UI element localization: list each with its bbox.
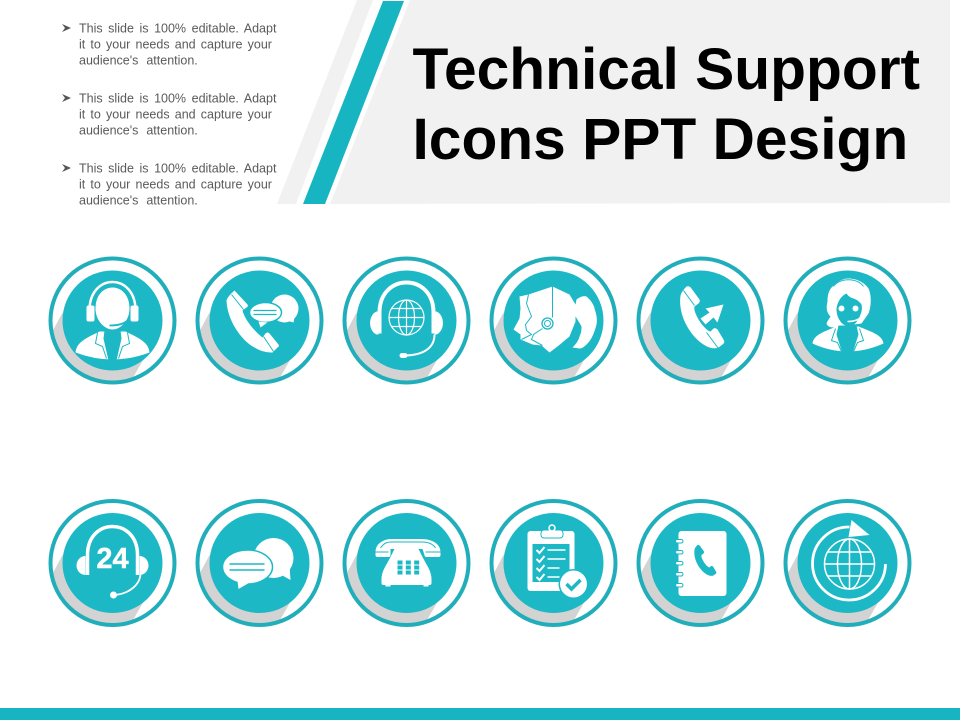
icon: two speech bubbles	[194, 501, 322, 635]
bullet text block 2: This slide is 100% editable. Adapt	[79, 92, 277, 106]
bullet text block 1: This slide is 100% editable. Adapt	[79, 22, 277, 36]
bullet text block 2: it to your needs and capture your	[79, 108, 272, 122]
icon: phone address book	[634, 501, 762, 635]
icon: phone handset with outgoing arrow	[634, 258, 762, 392]
icon: phone handset with chat bubbles	[194, 258, 322, 392]
bullet text block 1	[62, 22, 277, 68]
icon: male support agent with headset	[46, 258, 174, 392]
light gray diagonal stripe	[277, 0, 373, 204]
bullet text block 3: it to your needs and capture your	[79, 178, 272, 192]
icon: globe with circular arrow	[782, 501, 910, 635]
teal diagonal stripe	[303, 1, 404, 204]
icon: clipboard checklist	[488, 501, 616, 635]
title	[412, 37, 920, 172]
title: Technical Support	[412, 37, 920, 102]
bullet text block 3: audience's attention.	[79, 194, 198, 208]
title: Icons PPT Design	[412, 107, 908, 172]
icon: 24 hour headset	[46, 501, 174, 635]
bullet text block 3: This slide is 100% editable. Adapt	[79, 162, 277, 176]
footer bar	[0, 708, 960, 720]
icon: desk telephone	[340, 501, 468, 635]
icon: globe with headset	[340, 258, 468, 392]
bullet text block 2	[62, 92, 277, 138]
icon: female support agent with headset	[782, 258, 910, 392]
bullet text block 3	[62, 162, 277, 208]
background panel: title	[330, 0, 950, 204]
bullet text block 1: audience's attention.	[79, 54, 198, 68]
icon: 24 hour headset: 24	[96, 543, 129, 575]
icon: call centre agents in profile	[488, 258, 616, 392]
bullet text block 1: it to your needs and capture your	[79, 38, 272, 52]
bullet text block 2: audience's attention.	[79, 124, 198, 138]
